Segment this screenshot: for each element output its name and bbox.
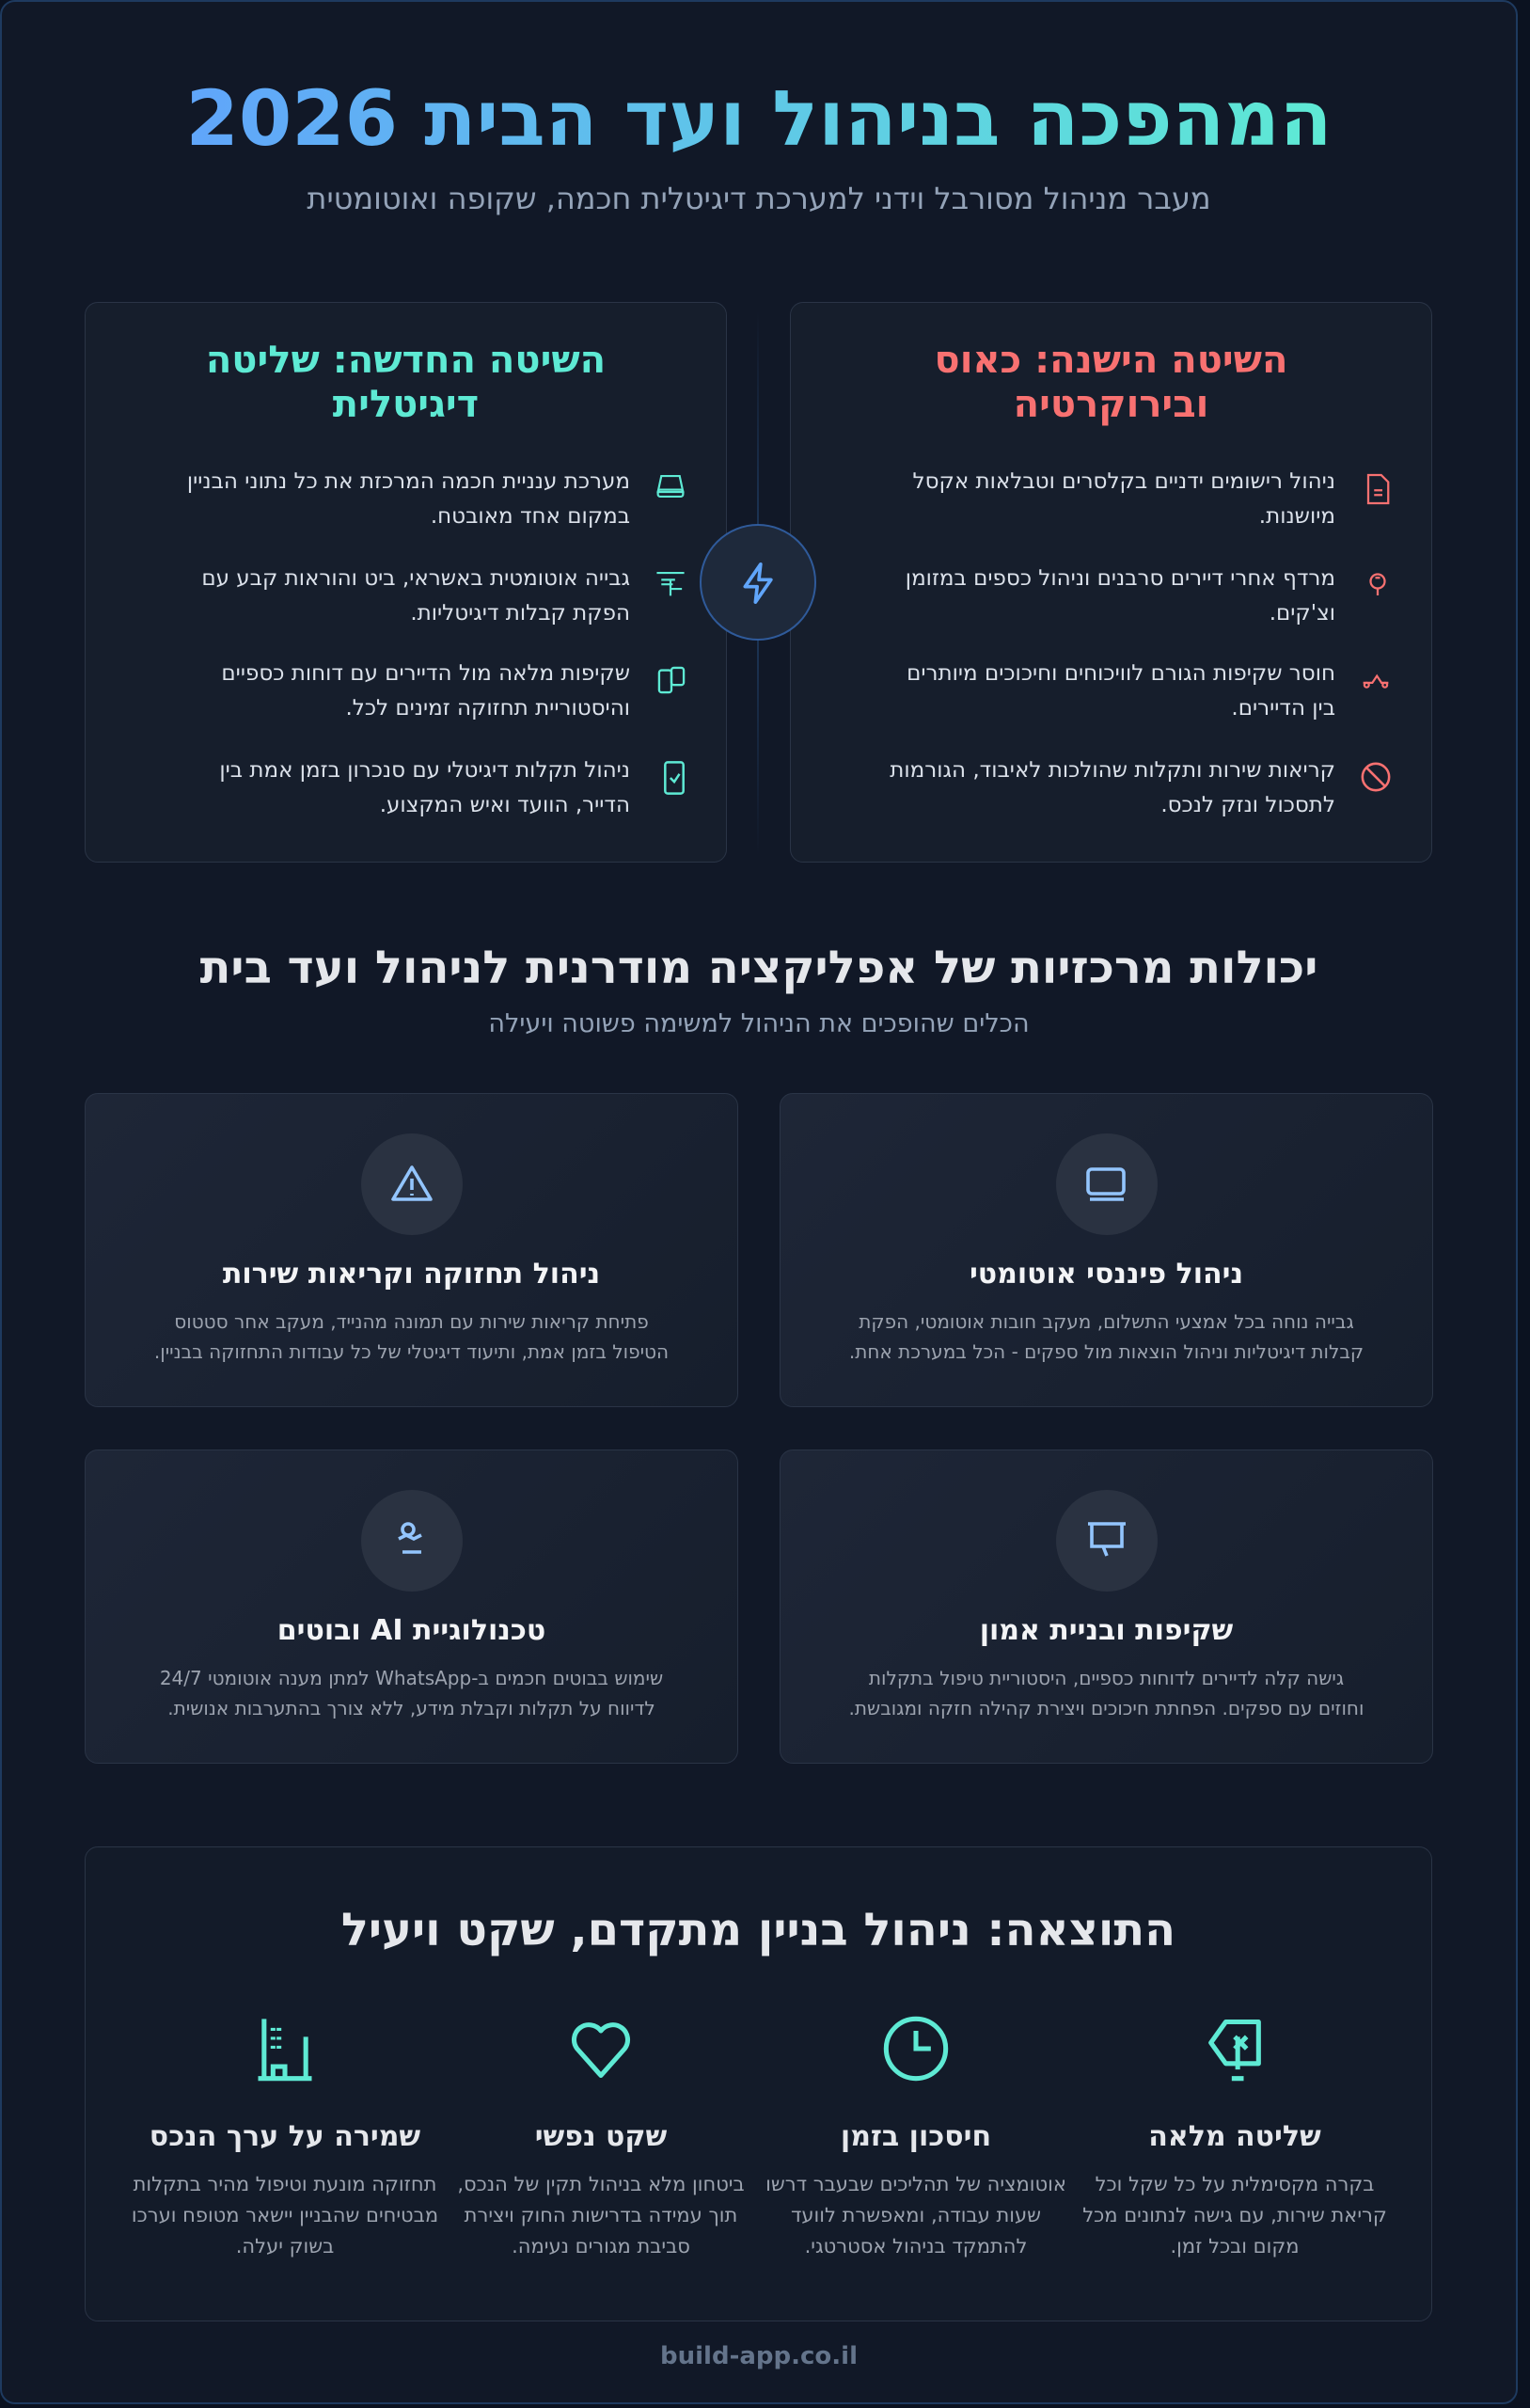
result: time saving: אוטומציה של תהליכים שבעבר דרשו שעות עבודה, ומאפשרת לוועד להתמקד בניהול אסטרטגי. [765, 2173, 1066, 2258]
results heading: התוצאה: ניהול בניין מתקדם, שקט ויעיל [341, 1904, 1175, 1956]
panel: old method [790, 302, 1432, 863]
item: chasing tenants: מרדף אחרי דיירים סרבנים וניהול כספים במזומן וצ'קים. [906, 566, 1335, 626]
icon: AI [361, 1490, 463, 1592]
panel: results [85, 1846, 1432, 2321]
card: finance: ניהול פיננסי אוטומטי [970, 1258, 1243, 1291]
result: time saving [765, 2017, 1066, 2258]
result: asset value: שמירה על ערך הנכס [150, 2120, 420, 2153]
subtitle: מעבר מניהול מסורבל וידני למערכת דיגיטלית חכמה, שקופה ואוטומטית [307, 181, 1211, 216]
item: digital faults: ניהול תקלות דיגיטלי עם סנכרון בזמן אמת בין הדייר, הוועד ואיש המקצוע. [219, 758, 630, 817]
divider line [757, 310, 759, 856]
item: manual records: ניהול רישומים ידניים בקלסרים וטבלאות אקסל מיושנות. [913, 469, 1335, 529]
item: lost calls: קריאות שירות ותקלות שהולכות לאיבוד, הגורמות לתסכול ונזק לנכס. [890, 758, 1335, 817]
section heading: capabilities: יכולות מרכזיות של אפליקציה מודרנית לניהול ועד בית [200, 942, 1317, 994]
card: transparency: גישה קלה לדיירים לדוחות כספיים, היסטוריית טיפול בתקלות וחוזים עם ספקים. הפחתת חיכוכים ויצירת קהילה חזקה ומגובשת. [849, 1667, 1364, 1719]
result: asset value: תחזוקה מונעת וטיפול מהיר בתקלות מבטיחים שהבניין יישאר מטופח וערכו בשוק יעלה. [132, 2173, 438, 2258]
result: peace of mind [457, 2022, 745, 2258]
heading: new: השיטה החדשה: שליטה [206, 339, 606, 382]
card: finance [780, 1093, 1433, 1407]
result: peace of mind: שקט נפשי [535, 2120, 667, 2153]
icon: warning [361, 1133, 463, 1235]
result: full control: בקרה מקסימלית על כל שקל וכל קריאת שירות, עם גישה לנתונים מכל מקום ובכל זמן. [1082, 2173, 1387, 2258]
result: asset value [132, 2019, 438, 2258]
item: full transparency: שקיפות מלאה מול הדיירים עם דוחות כספיים והיסטוריית תחזוקה זמינים לכל. [221, 661, 630, 721]
card: finance: גבייה נוחה בכל אמצעי התשלום, מעקב חובות אוטומטי, הפקת קבלות דיגיטליות וניהול הוצאות מול ספקים - הכל במערכת אחת. [849, 1310, 1364, 1363]
heading: old [935, 339, 1287, 426]
title: המהפכה בניהול ועד הבית 2026 [186, 75, 1332, 164]
panel: new method [85, 302, 727, 863]
result: full control [1082, 2020, 1387, 2258]
card: transparency [780, 1450, 1433, 1764]
icon: finance [1056, 1133, 1158, 1235]
card: AI: שימוש בבוטים חכמים ב-WhatsApp למתן מענה אוטומטי 24/7 לדיווח על תקלות וקבלת מידע, ללא צורך בהתערבות אנושית. [160, 1667, 663, 1719]
result: full control: שליטה מלאה [1148, 2120, 1321, 2153]
card: transparency: שקיפות ובניית אמון [980, 1614, 1233, 1647]
card: AI: טכנולוגיית AI ובוטים [277, 1614, 545, 1647]
item: auto collection: גבייה אוטומטית באשראי, ביט והוראות קבע עם הפקת קבלות דיגיטליות. [201, 566, 630, 626]
card: maintenance: ניהול תחזוקה וקריאות שירות [223, 1258, 600, 1291]
footer: build-app.co.il [660, 2342, 858, 2370]
result: time saving: חיסכון בזמן [841, 2120, 991, 2153]
card: maintenance [85, 1093, 738, 1407]
heading: new: דיגיטלית [333, 383, 479, 426]
result: peace of mind: ביטחון מלא בניהול תקין של הנכס, תוך עמידה בדרישות החוק ויצירת סביבת מגורים נעימה. [457, 2173, 745, 2258]
item: cloud system: מערכת ענניית חכמה המרכזת את כל נתוני הבניין במקום אחד מאובטח. [187, 469, 630, 529]
section subtitle: הכלים שהופכים את הניהול למשימה פשוטה ויעילה [488, 1009, 1030, 1038]
card: maintenance: פתיחת קריאות שירות עם תמונה מהנייד, מעקב אחר סטטוס הטיפול בזמן אמת, ותיעוד דיגיטלי של כל עבודות התחזוקה בבניין. [154, 1310, 669, 1363]
heading: old: השיטה הישנה: כאוס [935, 339, 1287, 382]
item: lack of transparency: חוסר שקיפות הגורם לוויכוחים וחיכוכים מיותרים בין הדיירים. [907, 661, 1335, 721]
card: AI [85, 1450, 738, 1764]
heading: new [206, 339, 606, 426]
icon: screen [1056, 1490, 1158, 1592]
heading: old: ובירוקרטיה [1014, 383, 1208, 426]
icon: lightning circle [700, 524, 816, 641]
